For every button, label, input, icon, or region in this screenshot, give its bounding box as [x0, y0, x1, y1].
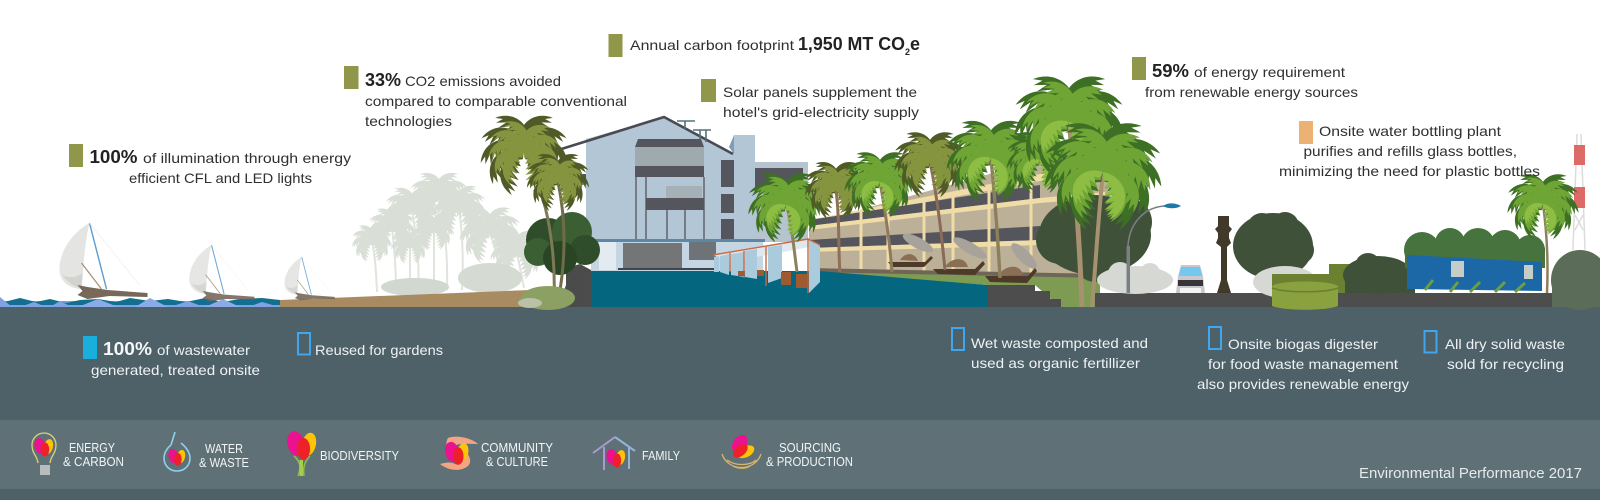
callout: annual carbon footprint: 1,950 MT CO	[798, 34, 905, 54]
panel: legend band	[0, 420, 1600, 489]
sailboat large	[59, 223, 147, 299]
left palms and garden	[480, 107, 600, 310]
callout: water bottling: minimizing the need for plastic bottles	[1279, 163, 1540, 179]
far right bush	[1551, 250, 1600, 310]
callout: water bottling: purifies and refills glass bottles,	[1304, 143, 1517, 159]
round tree	[1233, 212, 1314, 279]
pool	[590, 271, 987, 307]
pale bush behind digester	[1253, 266, 1317, 298]
street lamp	[1126, 203, 1181, 293]
callout: 100% wastewater: generated, treated onsite	[91, 362, 260, 378]
legend: water and waste	[164, 432, 249, 471]
callout: annual carbon footprint: 2	[905, 47, 910, 57]
large foreground palms	[1006, 66, 1162, 307]
road	[1095, 293, 1559, 307]
legend: energy and carbon: & CARBON	[63, 455, 124, 469]
sailboat medium	[189, 245, 254, 301]
callout: wet waste: used as organic fertillizer	[971, 355, 1140, 371]
pool pavilion	[713, 239, 820, 293]
callout: biogas digester	[1197, 327, 1409, 392]
icon: nest	[722, 430, 761, 468]
callout: 33% CO2 avoided: technologies	[365, 113, 452, 129]
traffic light	[1215, 216, 1232, 293]
icon: hands	[440, 437, 478, 470]
callout: 100% illumination: 100%	[90, 147, 138, 167]
legend: community and culture: COMMUNITY	[481, 441, 554, 455]
beach	[280, 290, 592, 307]
right wing	[752, 162, 808, 242]
faded background palms	[352, 167, 544, 296]
callout: 59% renewable: from renewable energy sources	[1145, 84, 1358, 100]
solar panels	[677, 121, 711, 142]
callout: 33% CO2 avoided: 33%	[365, 70, 401, 90]
tower windows	[721, 160, 734, 187]
callout: annual carbon footprint	[608, 34, 920, 57]
legend: family: FAMILY	[642, 449, 681, 463]
callout: 100% wastewater	[83, 336, 260, 378]
grass lawn	[800, 271, 1100, 307]
callout: 100% wastewater: 100%	[103, 339, 152, 359]
rocks by pool	[558, 264, 591, 307]
legend: water and waste: & WASTE	[199, 456, 249, 470]
pool steps	[987, 285, 1061, 307]
callout: 59% renewable	[1132, 57, 1358, 100]
callout: wet waste: Wet waste composted and	[971, 335, 1148, 351]
sailboat small	[285, 257, 335, 300]
footer caption: Environmental Performance 2017	[1359, 466, 1582, 482]
callout: 33% CO2 avoided	[344, 66, 627, 129]
callout: 59% renewable: of energy requirement	[1194, 64, 1345, 80]
long hotel wing	[809, 140, 1108, 278]
roof line	[555, 117, 733, 154]
hotel front palms	[748, 112, 1036, 278]
callout: biogas digester: Onsite biogas digester	[1228, 336, 1378, 352]
biogas digester	[1272, 264, 1354, 310]
dark bush	[1343, 253, 1415, 294]
callout: reused for gardens: Reused for gardens	[315, 342, 443, 358]
legend: sourcing and production: SOURCING	[779, 441, 841, 455]
callout: 33% CO2 avoided: compared to comparable conventional	[365, 93, 627, 109]
right palm	[1507, 167, 1579, 293]
callout: 100% wastewater: of wastewater	[157, 342, 250, 358]
callout: biogas digester: for food waste management	[1208, 356, 1398, 372]
grey bush	[1097, 262, 1173, 294]
callout: 59% renewable: 59%	[1152, 61, 1189, 81]
legend: biodiversity: BIODIVERSITY	[320, 449, 400, 463]
callout: 100% illumination	[69, 144, 351, 186]
legend: energy and carbon: ENERGY	[69, 441, 116, 455]
callout: biogas digester: also provides renewable energy	[1197, 376, 1409, 392]
blue container	[1407, 255, 1542, 292]
legend: community and culture	[440, 437, 554, 470]
legend: sourcing and production	[722, 430, 853, 469]
upper windows	[635, 139, 704, 147]
legend: family	[593, 437, 681, 470]
main body	[586, 117, 734, 240]
callout: dry solid waste: All dry solid waste	[1445, 336, 1565, 352]
callout: 33% CO2 avoided: CO2 emissions avoided	[405, 73, 561, 89]
main hotel building	[555, 117, 808, 271]
legend: water and waste: WATER	[205, 442, 243, 456]
callout: 100% illumination: efficient CFL and LED lights	[129, 170, 312, 186]
legend: community and culture: & CULTURE	[486, 455, 548, 469]
callout: annual carbon footprint: e	[910, 34, 920, 54]
callout: water bottling: Onsite water bottling plant	[1319, 123, 1501, 139]
callout: water bottling	[1279, 121, 1540, 179]
callout: reused for gardens	[298, 333, 443, 358]
sea waves	[0, 297, 280, 307]
tower	[734, 135, 755, 242]
callout: 100% illumination: of illumination through energy	[143, 150, 351, 166]
callout: dry solid waste: sold for recycling	[1447, 356, 1564, 372]
trees behind container	[1404, 228, 1545, 268]
sun loungers and umbrellas	[888, 230, 1040, 283]
left stub balcony	[574, 174, 588, 183]
legend: sourcing and production: & PRODUCTION	[766, 455, 853, 469]
icon: flower	[285, 430, 318, 476]
icon: water drop	[164, 432, 190, 471]
icon: house	[593, 437, 635, 470]
callout: dry solid waste	[1424, 331, 1565, 372]
legend: biodiversity	[285, 430, 400, 476]
telecom tower	[1573, 134, 1585, 250]
callout: annual carbon footprint: Annual carbon footprint	[630, 37, 794, 53]
callout: solar panels: Solar panels supplement the	[723, 84, 917, 100]
legend: energy and carbon	[32, 433, 124, 475]
panel: lower wastewater band	[0, 307, 1600, 500]
callout: solar panels	[701, 79, 919, 120]
callout: wet waste	[952, 328, 1148, 371]
icon: light bulb	[32, 433, 56, 475]
dark tree behind big palms	[1036, 195, 1152, 282]
car	[1176, 265, 1205, 293]
callout: solar panels: hotel's grid-electricity supply	[723, 104, 919, 120]
ground floor	[591, 242, 763, 271]
